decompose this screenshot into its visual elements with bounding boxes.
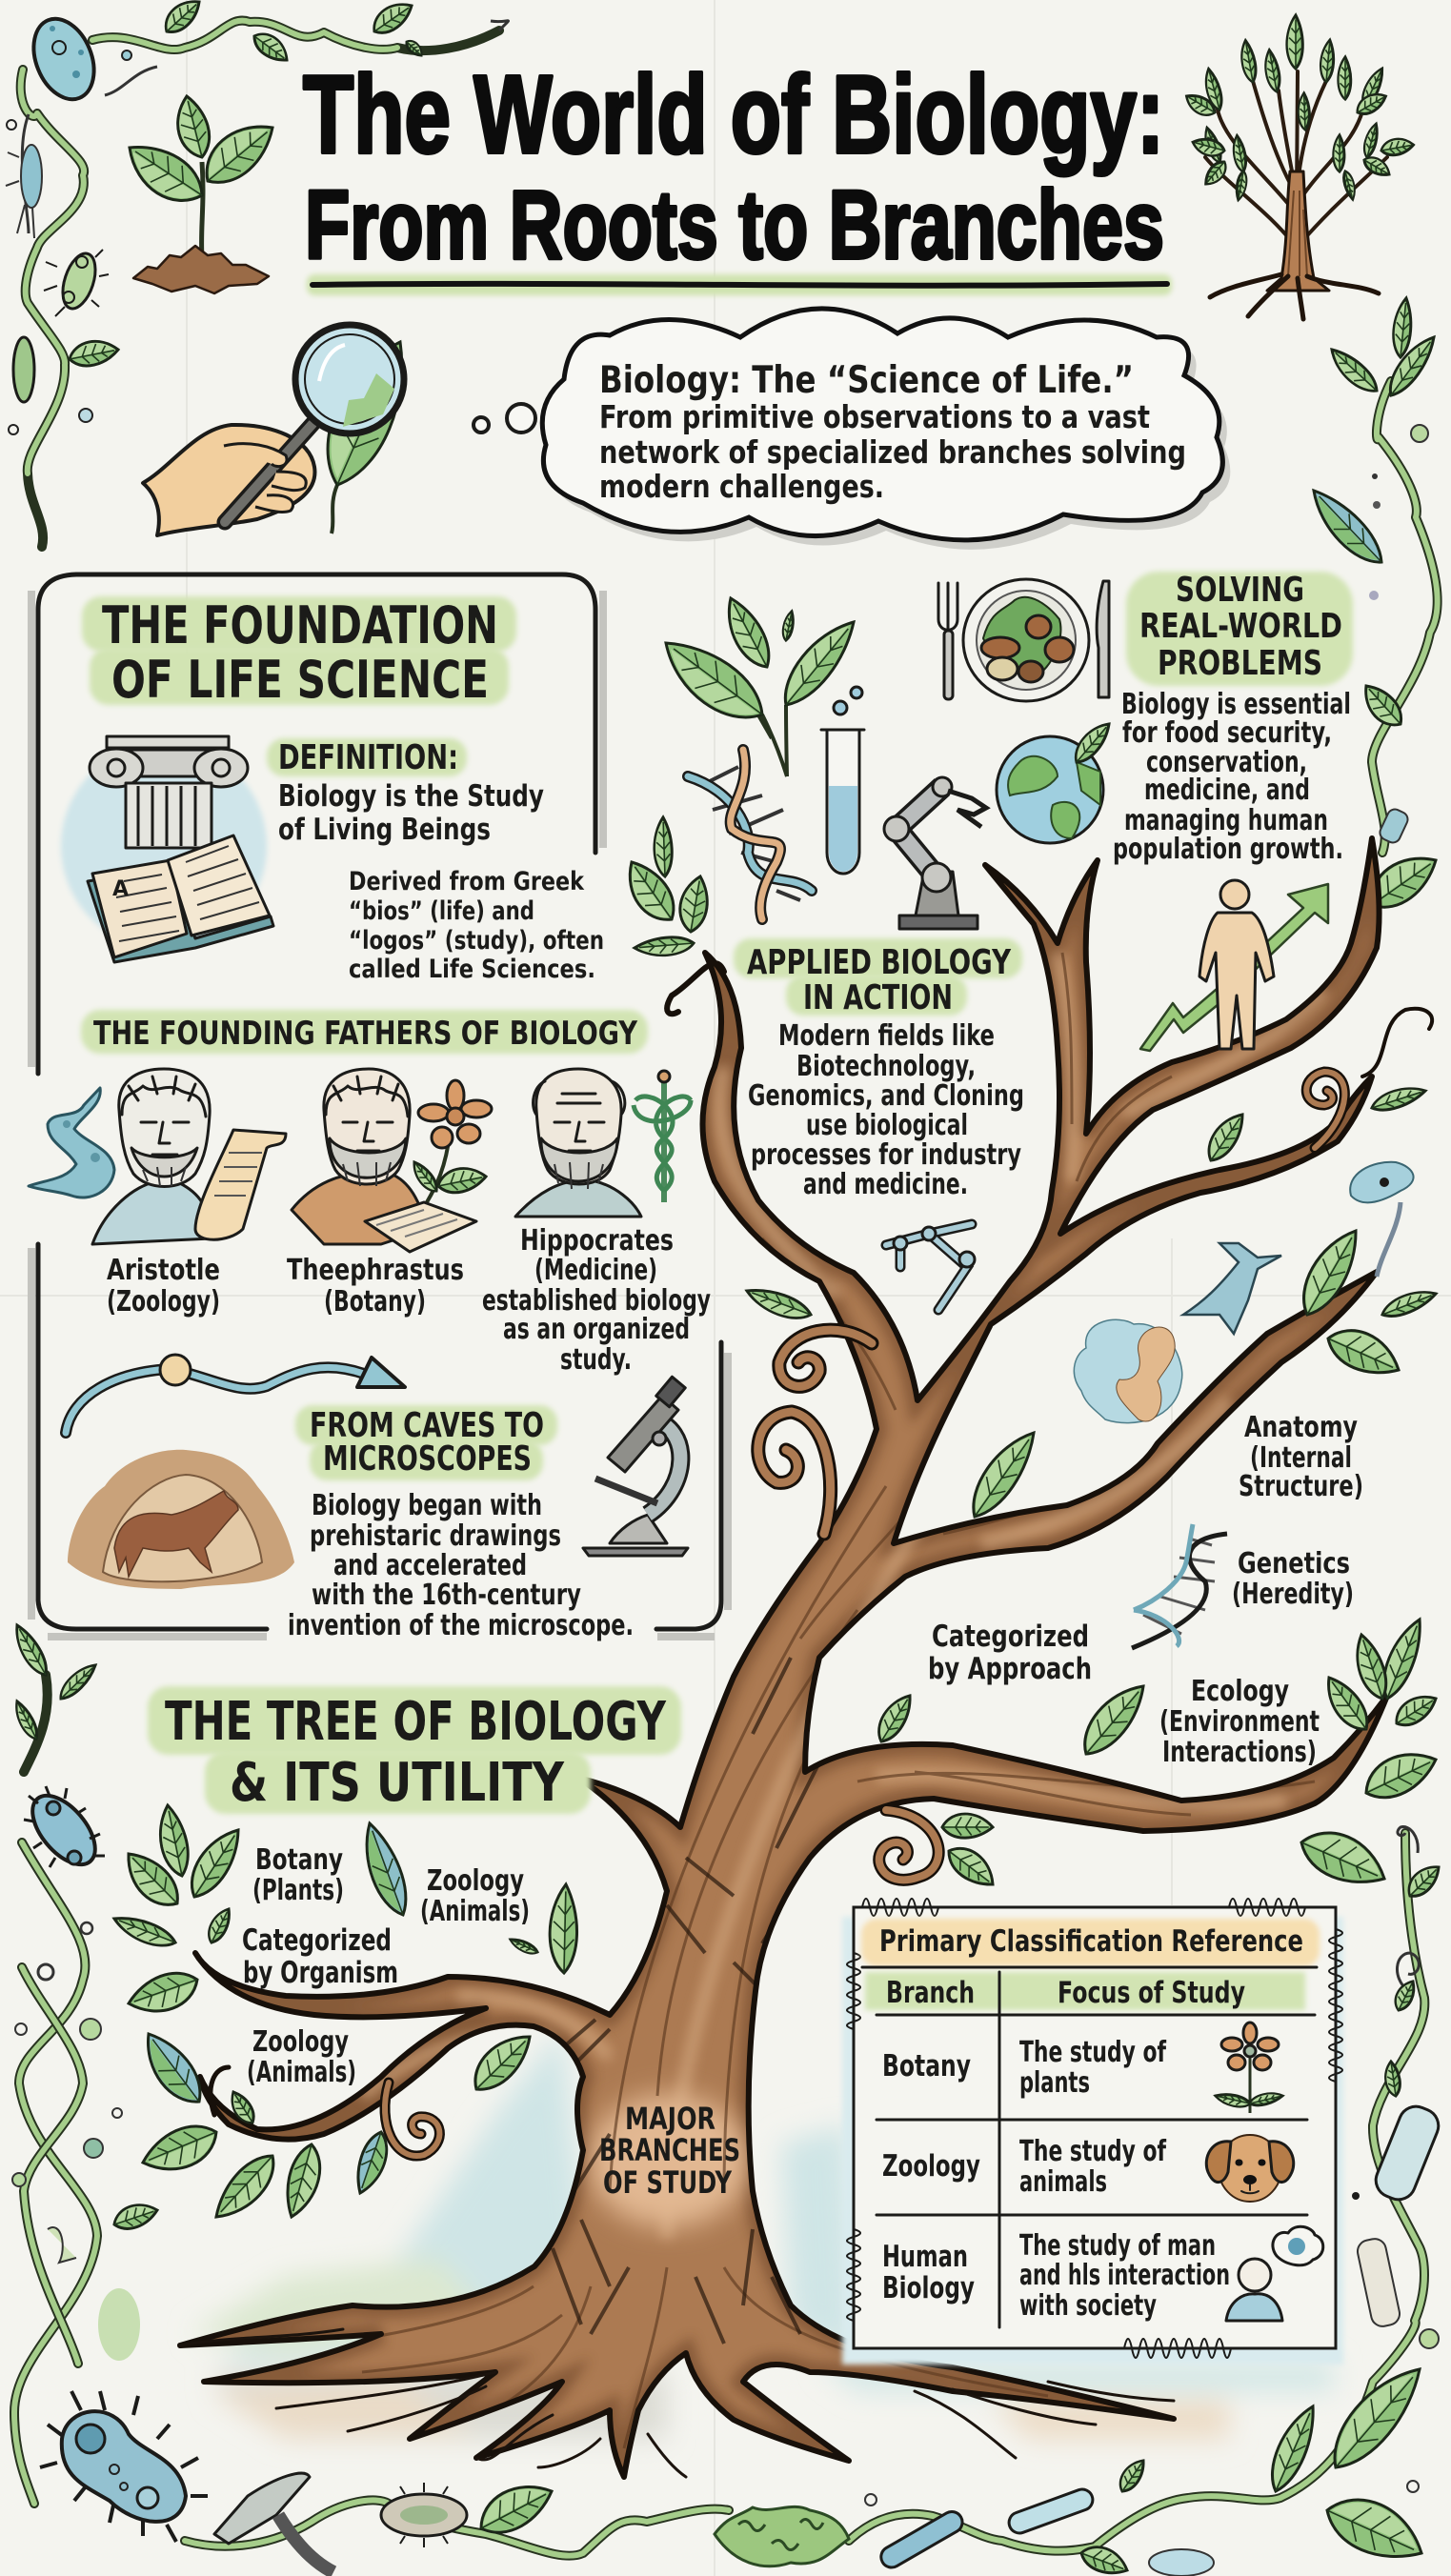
label: categorized by organism: Categorized — [242, 1923, 392, 1958]
icon: cave painting — [68, 1450, 294, 1589]
heading: foundation: OF LIFE SCIENCE — [111, 650, 489, 710]
table title band — [861, 1919, 1320, 1966]
label: categorized by organism: by Organism — [243, 1956, 398, 1990]
label: botany plants — [252, 1843, 344, 1907]
text: applied biology in action: Modern fields like — [778, 1019, 995, 1053]
table title band: Primary Classification Reference — [879, 1924, 1303, 1959]
label: major branches of study: OF STUDY — [603, 2164, 733, 2201]
text: solving real-world problems: PROBLEMS — [1158, 644, 1322, 683]
table row: botany — [882, 2023, 1283, 2113]
text: solving real-world problems: REAL-WORLD — [1139, 607, 1342, 646]
text: hippocrates — [482, 1224, 711, 1377]
root tendrils — [180, 2329, 1174, 2477]
icon: theophrastus bust with flower and book — [292, 1069, 492, 1252]
table row: human biology: with society — [1019, 2289, 1157, 2323]
table row: human biology: and hls interaction — [1019, 2259, 1230, 2292]
text: solving real-world problems: medicine, and — [1144, 774, 1310, 807]
icon: hand with magnifying glass and leaf — [143, 325, 423, 535]
label: genetics: (Heredity) — [1232, 1578, 1354, 1611]
table row: human biology: The study of man — [1019, 2229, 1216, 2263]
definition text: of Living Beings — [278, 813, 491, 847]
right vine with leaves — [1302, 297, 1445, 918]
icon: molecule fragment — [886, 1224, 975, 1310]
text: from caves to microscopes: MICROSCOPES — [323, 1439, 532, 1479]
label: anatomy: (Internal — [1250, 1441, 1352, 1475]
icon: small full tree top right — [1182, 15, 1415, 319]
etymology text: Derived from Greek — [349, 867, 585, 896]
intro cloud callout: network of specialized branches solving — [599, 433, 1186, 471]
label: zoology animals upper: (Animals) — [420, 1895, 530, 1928]
table row: botany: Botany — [882, 2049, 971, 2083]
text: applied biology in action: IN ACTION — [803, 978, 953, 1017]
label: botany plants: Botany — [255, 1843, 343, 1877]
table: primary classification reference — [842, 1899, 1343, 2365]
icon: anatomy cloud — [1074, 1319, 1182, 1423]
table row: zoology: The study of — [1019, 2135, 1167, 2168]
text: from caves to microscopes: FROM CAVES TO — [310, 1406, 544, 1445]
table row: botany: plants — [1019, 2066, 1090, 2100]
panel: tree of biology main tree — [111, 817, 1442, 2477]
heading: tree of biology: THE TREE OF BIOLOGY — [165, 1691, 667, 1753]
text: theophrastus: (Botany) — [324, 1285, 426, 1318]
icon: dna helix — [688, 750, 812, 919]
text: from caves to microscopes: Biology began with — [312, 1489, 542, 1522]
heading: foundation — [82, 595, 516, 710]
text: from caves to microscopes: with the 16th-century — [312, 1579, 581, 1612]
text: applied biology in action: processes for industry — [751, 1138, 1021, 1172]
text: solving real-world problems: for food security, — [1122, 716, 1332, 750]
title underline — [307, 274, 1172, 295]
bottom vine with decorations — [185, 1827, 1444, 2576]
icon: hippocrates bust with caduceus — [515, 1069, 691, 1217]
label: categorized by approach — [928, 1620, 1092, 1686]
table header row: Branch — [886, 1976, 975, 2010]
label: anatomy: Structure) — [1239, 1470, 1363, 1503]
text: from caves to microscopes: invention of the microscope. — [288, 1609, 634, 1642]
label: anatomy — [1239, 1411, 1363, 1503]
icon: column and open book: A — [112, 877, 129, 901]
watercolor wash behind tree — [191, 2029, 1334, 2439]
icon: leaf sprig — [651, 593, 865, 776]
label: genetics: Genetics — [1238, 1547, 1350, 1580]
etymology text: “logos” (study), often — [349, 926, 604, 956]
icon: globe with leaf — [997, 717, 1115, 843]
text: solving real-world problems: conservation, — [1146, 746, 1307, 779]
arrow: timeline — [66, 1355, 405, 1433]
text: applied biology in action: use biological — [806, 1109, 968, 1142]
label: ecology: (Environment — [1159, 1705, 1320, 1739]
label: major branches of study: MAJOR — [625, 2101, 715, 2137]
table row: human biology: Human — [882, 2240, 968, 2274]
label: ecology: Ecology — [1191, 1675, 1289, 1708]
text: solving real-world problems: SOLVING — [1176, 571, 1304, 610]
intro cloud callout — [542, 309, 1230, 550]
table row: zoology: Zoology — [882, 2149, 980, 2184]
heading: tree of biology — [148, 1686, 681, 1814]
label: ecology: Interactions) — [1162, 1736, 1317, 1769]
text: applied biology in action: and medicine. — [803, 1168, 968, 1201]
text: applied biology in action: APPLIED BIOLOGY — [747, 943, 1012, 982]
icon: genetics helix — [1132, 1524, 1227, 1648]
icon: robot arm — [884, 777, 986, 929]
intro cloud callout: From primitive observations to a vast — [599, 398, 1150, 435]
panel: the foundation of life science — [29, 574, 728, 1642]
label: categorized by approach: by Approach — [928, 1652, 1092, 1686]
icon: top left vine with microbe — [6, 0, 509, 547]
text: solving real-world problems: population growth. — [1113, 833, 1343, 866]
table row: zoology: animals — [1019, 2165, 1107, 2199]
text: applied biology in action: Genomics, and Cloning — [748, 1079, 1024, 1113]
label: categorized by organism — [242, 1923, 398, 1990]
label: zoology animals upper — [420, 1864, 530, 1928]
title — [303, 52, 1164, 279]
etymology text: called Life Sciences. — [349, 955, 595, 984]
label: anatomy: Anatomy — [1244, 1411, 1358, 1444]
table header row — [862, 1967, 1317, 2327]
label: zoology animals lower — [247, 2025, 356, 2089]
label: zoology animals upper: Zoology — [427, 1864, 524, 1898]
text: hippocrates: study. — [560, 1343, 632, 1377]
text: from caves to microscopes — [288, 1405, 634, 1642]
text: solving real-world problems: managing human — [1124, 804, 1328, 837]
title: The World of Biology: — [303, 52, 1164, 176]
icon: aristotle bust — [29, 1069, 286, 1244]
text: aristotle: (Zoology) — [107, 1285, 220, 1318]
definition text: DEFINITION: — [278, 738, 458, 777]
text: theophrastus — [287, 1254, 464, 1318]
icon: test tube — [821, 687, 864, 874]
icon: blue creature — [1183, 1243, 1281, 1334]
text: hippocrates: Hippocrates — [520, 1224, 674, 1258]
label: zoology animals lower: (Animals) — [247, 2056, 356, 2089]
text: applied biology in action — [734, 938, 1024, 1201]
title: From Roots to Branches — [305, 171, 1164, 279]
text: hippocrates: established biology — [482, 1284, 711, 1318]
label: ecology — [1159, 1675, 1320, 1769]
intro cloud callout: modern challenges. — [599, 468, 884, 505]
text: applied biology in action: Biotechnology, — [796, 1050, 976, 1083]
heading: founding fathers: THE FOUNDING FATHERS OF BIOLOGY — [93, 1015, 637, 1053]
definition text — [267, 738, 544, 847]
table header row: Focus of Study — [1058, 1976, 1245, 2010]
heading: tree of biology: & ITS UTILITY — [230, 1752, 565, 1814]
intro cloud callout: Biology: The “Science of Life.” — [599, 359, 1134, 402]
thought bubbles — [474, 404, 535, 433]
label: major branches of study — [599, 2101, 740, 2201]
heading: foundation: THE FOUNDATION — [102, 595, 498, 655]
label: zoology animals lower: Zoology — [252, 2025, 349, 2059]
text: from caves to microscopes: and accelerated — [333, 1549, 527, 1582]
spirals — [211, 963, 1432, 2156]
table row: human biology: Biology — [882, 2271, 975, 2305]
icon: microscope — [583, 1377, 688, 1556]
text: hippocrates: (Medicine) — [534, 1254, 657, 1287]
icon: small blue cell — [1350, 1162, 1414, 1277]
icon: person with growth arrow — [1140, 880, 1328, 1051]
etymology text — [349, 867, 604, 984]
text: solving real-world problems — [1113, 571, 1353, 866]
icon: large microbe bottom left — [40, 2391, 208, 2542]
label: genetics — [1232, 1547, 1354, 1611]
table row: zoology — [882, 2135, 1294, 2202]
label: major branches of study: BRANCHES — [599, 2132, 740, 2168]
table row: botany: The study of — [1019, 2036, 1167, 2069]
text: aristotle — [107, 1254, 220, 1318]
text: from caves to microscopes: prehistaric drawings — [310, 1519, 561, 1553]
icon: seedling in soil — [117, 93, 284, 293]
table row: human biology — [882, 2226, 1323, 2323]
etymology text: “bios” (life) and — [349, 896, 534, 926]
left lower vine with microbes — [10, 1621, 160, 2504]
branch leaves — [111, 817, 1442, 2228]
label: categorized by approach: Categorized — [932, 1620, 1089, 1654]
text: hippocrates: as an organized — [503, 1313, 690, 1346]
icon: column and open book — [61, 736, 273, 962]
definition text: Biology is the Study — [278, 779, 544, 814]
icon: plate of food with fork and knife — [938, 579, 1109, 701]
text: solving real-world problems: Biology is essential — [1121, 688, 1351, 721]
label: botany plants: (Plants) — [252, 1874, 344, 1907]
text: theophrastus: Theephrastus — [287, 1254, 464, 1287]
text: aristotle: Aristotle — [107, 1254, 220, 1287]
